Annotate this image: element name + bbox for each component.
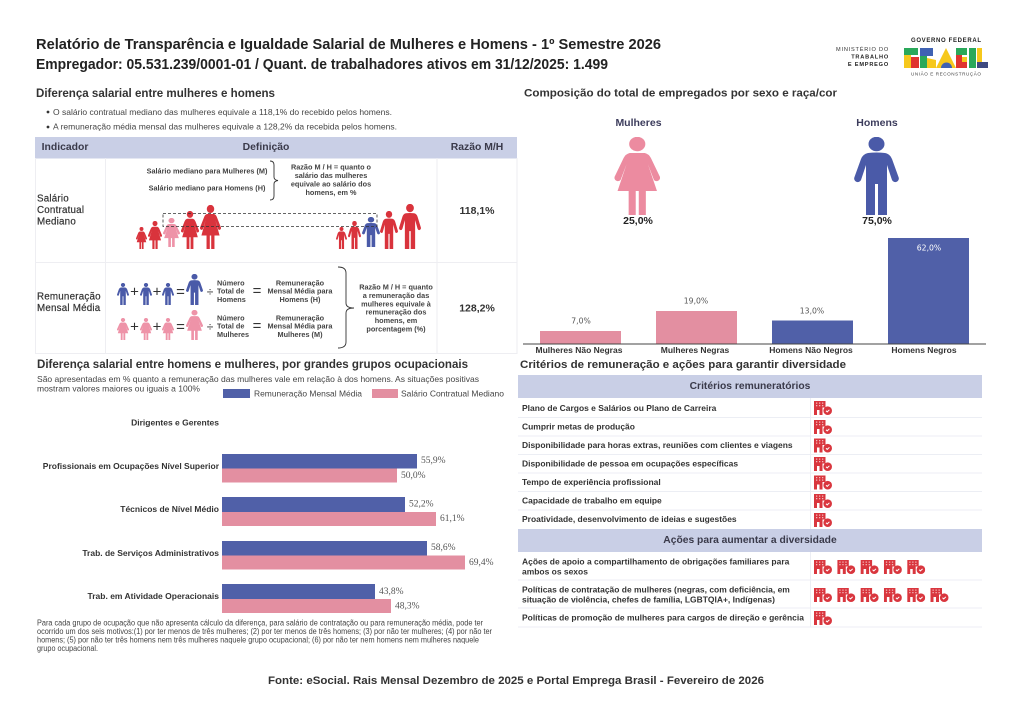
- icons: homens ordenados por salário: [336, 204, 421, 249]
- logo: ministério e governo federal: [836, 38, 988, 76]
- brace and ratio note: homens, em: [375, 316, 418, 325]
- group: dirigentes e gerentes: Dirigentes e Gerentes: [131, 418, 219, 428]
- formula: mulheres: Mulheres (M): [278, 330, 323, 339]
- header: critérios remuneratórios: Critérios remuneratórios: [690, 381, 811, 392]
- table: indicadores: [35, 137, 517, 354]
- pictogram: mulheres: 25,0%: [623, 215, 654, 227]
- legend: Remuneração Mensal Média: [254, 388, 362, 398]
- row label: remuneração mensal média: Remuneração: [37, 292, 101, 302]
- actions list: Políticas de promoção de mulheres para cargos de direção e gerência: [522, 612, 804, 622]
- criteria list: [522, 403, 793, 524]
- brace and ratio note: a remuneração das: [363, 291, 429, 300]
- title: Empregador: 05.531.239/0001-01 / Quant. de trabalhadores ativos em 31/12/2025: 1.499: [36, 57, 608, 73]
- footnote: [37, 618, 492, 653]
- brace and ratio note: remuneração dos: [366, 308, 426, 316]
- title: Relatório de Transparência e Igualdade Salarial de Mulheres e Homens - 1º Semestre 2026: [36, 37, 661, 53]
- group: profissionais: 55,9%: [421, 456, 446, 466]
- formula: mulheres: +: [153, 318, 162, 336]
- section heading: diferença salarial: Diferença salarial entre mulheres e homens: [36, 88, 275, 100]
- formula: homens: ÷: [207, 285, 214, 299]
- formula: homens: +: [130, 284, 139, 300]
- formula: mulheres: +: [130, 318, 139, 336]
- salário mediano definition: Salário mediano para Mulheres (M): [147, 166, 268, 176]
- salário mediano definition: equivale ao salário dos: [291, 180, 371, 188]
- bar chart: sexo e raça/cor: Mulheres Negras: [661, 345, 730, 355]
- explanatory text: [37, 374, 479, 394]
- formula: homens: Remuneração: [276, 278, 325, 288]
- logo: ministério e governo federal: MINISTÉRIO DO: [836, 46, 889, 53]
- criteria list: Cumprir metas de produção: [522, 422, 635, 432]
- group: serviços administrativos: 58,6%: [431, 543, 456, 553]
- bar chart: sexo e raça/cor: 19,0%: [684, 296, 708, 306]
- criteria list: Disponibilidade de pessoa em ocupações específicas: [522, 458, 738, 468]
- group: atividade operacionais: 48,3%: [395, 602, 420, 612]
- criteria list: Plano de Cargos e Salários ou Plano de Carreira: [522, 403, 717, 413]
- icons: critérios: [814, 401, 832, 527]
- row label: salário contratual mediano: Contratual: [37, 205, 84, 216]
- group: atividade operacionais: 43,8%: [379, 587, 404, 597]
- pictogram: mulheres: [614, 117, 662, 227]
- row label: remuneração mensal média: Mensal Média: [37, 303, 101, 314]
- group: técnicos: 61,1%: [440, 514, 465, 524]
- footnote: ocorrido um dos seis motivos:(1) por ter menos de três mulheres; (2) por ter menos de três homens; (3) por não ter mulheres; (4) por não ter: [37, 627, 492, 636]
- formula: mulheres: [117, 310, 333, 340]
- salário mediano definition: homens, em %: [305, 188, 357, 197]
- formula: mulheres: Número: [217, 314, 245, 322]
- formula: homens: Mensal Média para: [268, 286, 333, 296]
- actions list: [522, 556, 804, 622]
- formula: mulheres: Mensal Média para: [268, 322, 333, 330]
- salário mediano definition: Razão M / H = quanto o: [291, 162, 372, 172]
- formula: homens: +: [153, 284, 162, 300]
- source footer: Fonte: eSocial. Rais Mensal Dezembro de 2025 e Portal Emprega Brasil - Fevereiro de 2026: [268, 675, 764, 687]
- formula: homens: =: [176, 284, 185, 300]
- salário mediano definition: Salário mediano para Homens (H): [149, 184, 266, 192]
- heading: critérios: Critérios de remuneração e ações para garantir diversidade: [520, 359, 846, 371]
- explanatory text: mostram valores maiores ou iguais a 100%: [37, 384, 201, 394]
- row label: remuneração mensal média: [37, 292, 101, 314]
- pictogram: mulheres: Mulheres: [615, 117, 662, 129]
- bar chart: sexo e raça/cor: [523, 238, 986, 355]
- formula: mulheres: =: [253, 318, 262, 334]
- salário mediano definition: [147, 161, 372, 200]
- brace and ratio note: [338, 267, 433, 348]
- legend: Salário Contratual Mediano: [401, 388, 504, 398]
- table header: [42, 142, 503, 153]
- brace and ratio note: mulheres equivale à: [361, 300, 432, 308]
- group: técnicos: Técnicos de Nível Médio: [120, 504, 219, 514]
- header: ações: Ações para aumentar a diversidade: [663, 535, 837, 546]
- criteria list: Proatividade, desenvolvimento de ideias e sugestões: [522, 514, 737, 524]
- icons: mulheres ordenadas por salário: [136, 205, 221, 249]
- logo: ministério e governo federal: GOVERNO FEDERAL: [911, 38, 981, 44]
- icons: ações: [814, 560, 948, 625]
- value: remuneração média: 128,2%: [459, 302, 495, 314]
- group: serviços administrativos: Trab. de Serviços Administrativos: [82, 548, 219, 558]
- group: profissionais: [43, 454, 446, 482]
- logo: ministério e governo federal: E EMPREGO: [848, 62, 889, 68]
- formula: mulheres: =: [176, 318, 185, 336]
- actions list: ambos os sexos: [522, 566, 588, 576]
- salário mediano definition: salário das mulheres: [295, 171, 367, 180]
- table: critérios remuneratórios e ações: [518, 375, 982, 627]
- table header: Definição: [243, 142, 289, 153]
- bar chart: grupos ocupacionais: [43, 418, 494, 613]
- formula: homens: Total de: [217, 286, 244, 296]
- explanatory text: São apresentadas em % quanto a remuneração das mulheres vale em relação à dos homens. As situações positivas: [37, 374, 479, 384]
- criteria list: Capacidade de trabalho em equipe: [522, 496, 662, 506]
- bullet list: A remuneração média mensal das mulheres equivale a 128,2% da recebida pelos homens.: [53, 122, 397, 132]
- footnote: Para cada grupo de ocupação que não apresenta cálculo da diferença, para salário de contratação ou para remuneração média, pode ter: [37, 618, 483, 628]
- group: profissionais: 50,0%: [401, 471, 426, 481]
- pictogram: homens: Homens: [856, 117, 898, 129]
- group: serviços administrativos: 69,4%: [469, 558, 494, 568]
- bar chart: sexo e raça/cor: Homens Negros: [891, 345, 957, 355]
- group: técnicos: [120, 497, 465, 526]
- bar chart: sexo e raça/cor: Mulheres Não Negras: [536, 345, 623, 355]
- bar chart: sexo e raça/cor: 7,0%: [571, 316, 591, 326]
- heading: composição: Composição do total de empregados por sexo e raça/cor: [524, 88, 838, 100]
- footnote: grupo ocupacional.: [37, 644, 98, 653]
- table header: Indicador: [42, 142, 88, 153]
- bullet list: [47, 107, 397, 132]
- row label: salário contratual mediano: [37, 194, 84, 228]
- brace and ratio note: porcentagem (%): [366, 324, 426, 334]
- criteria list: Disponibilidade para horas extras, reuniões com clientes e viagens: [522, 440, 793, 450]
- actions list: Políticas de contratação de mulheres (negras, com deficiência, em: [522, 584, 790, 594]
- formula: mulheres: Mulheres: [217, 330, 249, 339]
- formula: homens: [117, 274, 333, 305]
- bar chart: sexo e raça/cor: 13,0%: [800, 306, 824, 316]
- dashed median box: [163, 214, 377, 226]
- formula: mulheres: Remuneração: [276, 314, 325, 322]
- group: serviços administrativos: [82, 541, 494, 570]
- formula: homens: =: [253, 282, 262, 300]
- bar chart: sexo e raça/cor: 62,0%: [917, 244, 941, 252]
- logo: ministério e governo federal: UNIÃO E RECONSTRUÇÃO: [911, 70, 981, 76]
- pictogram: homens: 75,0%: [862, 215, 893, 227]
- actions list: Ações de apoio a compartilhamento de obrigações familiares para: [522, 556, 790, 566]
- heading: grupos ocupacionais: Diferença salarial entre homens e mulheres, por grandes grupos ocupacionais: [37, 359, 468, 371]
- formula: mulheres: ÷: [207, 320, 214, 334]
- legend: [223, 388, 504, 398]
- row label: salário contratual mediano: Salário: [37, 194, 69, 204]
- pictogram: homens: [854, 117, 899, 227]
- group: técnicos: 52,2%: [409, 500, 434, 510]
- footnote: homens; (5) por não ter três homens nem três mulheres naquele grupo ocupacional; (6) por não ter nem homens nem mulheres naquele: [37, 636, 479, 644]
- group: atividade operacionais: Trab. em Atividade Operacionais: [88, 591, 219, 601]
- value: salário contratual: 118,1%: [459, 205, 495, 217]
- bullet list: O salário contratual mediano das mulheres equivale a 118,1% do recebido pelos homens.: [53, 107, 392, 117]
- formula: homens: Número: [217, 278, 245, 288]
- group: profissionais: Profissionais em Ocupações Nível Superior: [43, 461, 220, 471]
- formula: homens: Homens: [217, 295, 246, 304]
- logo: ministério e governo federal: TRABALHO: [851, 54, 889, 60]
- table header: Razão M/H: [451, 142, 503, 153]
- brace and ratio note: Razão M / H = quanto: [359, 282, 433, 292]
- formula: homens: Homens (H): [280, 295, 321, 304]
- bar chart: sexo e raça/cor: Homens Não Negros: [769, 345, 853, 355]
- group: atividade operacionais: [88, 584, 420, 613]
- criteria list: Tempo de experiência profissional: [522, 477, 661, 487]
- row label: salário contratual mediano: Mediano: [37, 216, 76, 228]
- title: [36, 37, 661, 73]
- formula: mulheres: Total de: [217, 322, 244, 330]
- actions list: situação de violência, chefes de família, LGBTQIA+, Indígenas): [522, 594, 775, 604]
